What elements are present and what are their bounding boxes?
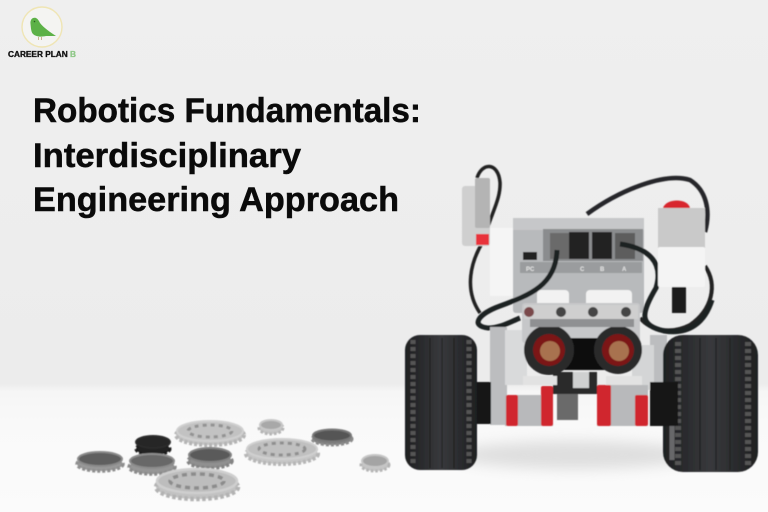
gear: light large centre right	[246, 439, 318, 464]
gear: dark right	[312, 430, 352, 445]
background wall	[0, 0, 768, 386]
gear: light large back	[176, 421, 244, 445]
title line 2: Interdisciplinary	[33, 137, 301, 175]
axle right	[650, 382, 678, 426]
logo name: CAREER PLAN B	[8, 50, 76, 59]
ultrasonic sensor	[524, 305, 642, 375]
gear: black	[136, 436, 170, 455]
logo ring	[22, 7, 62, 47]
brick body: PC	[526, 267, 535, 273]
left sensor	[462, 178, 513, 296]
centre block	[553, 372, 597, 394]
right sensor	[658, 200, 705, 313]
icon: green bird	[30, 18, 56, 40]
gear: small back	[259, 420, 283, 434]
left wheel	[405, 335, 477, 470]
right wheel	[662, 335, 758, 472]
floor shadow	[455, 441, 695, 469]
gear hubs with red rims	[505, 385, 648, 426]
side frames	[490, 327, 507, 425]
gear: light large front	[156, 469, 238, 499]
brick body	[513, 218, 644, 313]
port labels strip	[520, 262, 642, 273]
title line 3: Engineering Approach	[33, 181, 399, 219]
sensor mount	[522, 303, 640, 343]
gear: grey far left	[77, 452, 123, 471]
brick body: A	[622, 267, 627, 273]
gear: grey left centre	[129, 454, 175, 474]
title	[33, 92, 421, 219]
gear: grey centre	[188, 448, 232, 468]
ports panel	[543, 229, 643, 261]
brick body: C	[580, 267, 585, 273]
cable: right long arc	[587, 178, 707, 232]
logo: Career Plan B	[8, 7, 76, 59]
cable: left sensor loop	[470, 166, 500, 313]
gear: small right	[361, 455, 389, 471]
gears group	[77, 420, 389, 499]
robot	[405, 166, 758, 472]
cable: centre right	[620, 244, 712, 332]
background floor	[0, 384, 768, 512]
cable: centre left	[478, 250, 557, 328]
title line 1: Robotics Fundamentals:	[33, 92, 421, 130]
cable: right lower loop	[640, 266, 712, 330]
brick body: B	[600, 267, 605, 273]
axle left	[477, 382, 491, 424]
white studs	[537, 290, 569, 310]
